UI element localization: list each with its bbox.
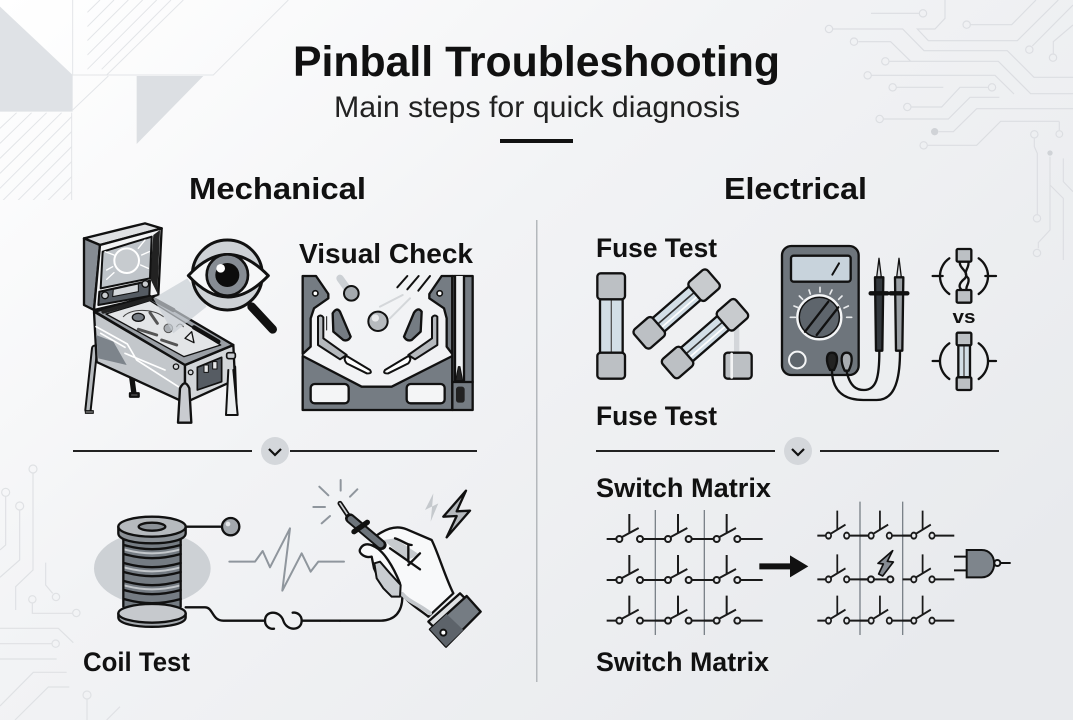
label: Coil Test: Coil Test	[83, 647, 190, 677]
sparks	[313, 480, 357, 523]
icon: hand holding probe	[340, 503, 481, 647]
label: Fuse Test (bottom): Fuse Test	[596, 401, 717, 431]
icon: coil circuit	[94, 480, 470, 629]
icon: fuses, multimeter and comparison	[597, 246, 996, 400]
label: Fuse Test (top): Fuse Test	[596, 233, 717, 263]
cuff	[428, 593, 481, 647]
decoration: bottom-left circuit traces	[0, 465, 120, 720]
subtitle: Main steps for quick diagnosis	[334, 91, 740, 124]
backbox	[84, 223, 162, 310]
fault spark	[878, 551, 893, 576]
probe	[340, 503, 382, 545]
icon: pinball machine with magnifier	[84, 223, 273, 423]
good fuse symbol	[933, 333, 996, 390]
title underline	[500, 139, 573, 143]
heading: Mechanical: Mechanical	[189, 171, 366, 206]
switch grid: fault	[817, 502, 954, 635]
magnifier eye	[188, 240, 273, 329]
heading: Electrical: Electrical	[724, 171, 867, 206]
icon: playfield flippers	[303, 276, 473, 410]
label: Switch Matrix (bottom): Switch Matrix	[596, 647, 769, 677]
bolts	[425, 493, 438, 522]
light cone	[153, 278, 207, 333]
label: Switch Matrix (top): Switch Matrix	[596, 473, 771, 503]
fuses	[597, 268, 752, 380]
blown fuse symbol	[933, 249, 996, 303]
front legs	[178, 370, 238, 423]
arrow	[759, 555, 808, 577]
cabinet	[94, 296, 235, 403]
diagram: switch matrices	[607, 502, 1011, 635]
logic gate	[954, 550, 1011, 577]
decoration: top-right circuit traces	[825, 0, 1073, 260]
decoration: top-left geometric shapes	[0, 0, 288, 203]
column divider	[536, 220, 538, 682]
divider left with chevron	[73, 437, 477, 465]
label: vs: vs	[952, 307, 976, 327]
heading: Visual Check: Visual Check	[299, 238, 473, 269]
divider right with chevron	[596, 437, 999, 465]
switch grid: normal	[607, 510, 763, 635]
hand	[360, 527, 453, 617]
multimeter	[782, 246, 907, 400]
spool	[118, 517, 186, 627]
title: Pinball Troubleshooting	[293, 38, 780, 86]
back and side legs	[85, 348, 237, 414]
